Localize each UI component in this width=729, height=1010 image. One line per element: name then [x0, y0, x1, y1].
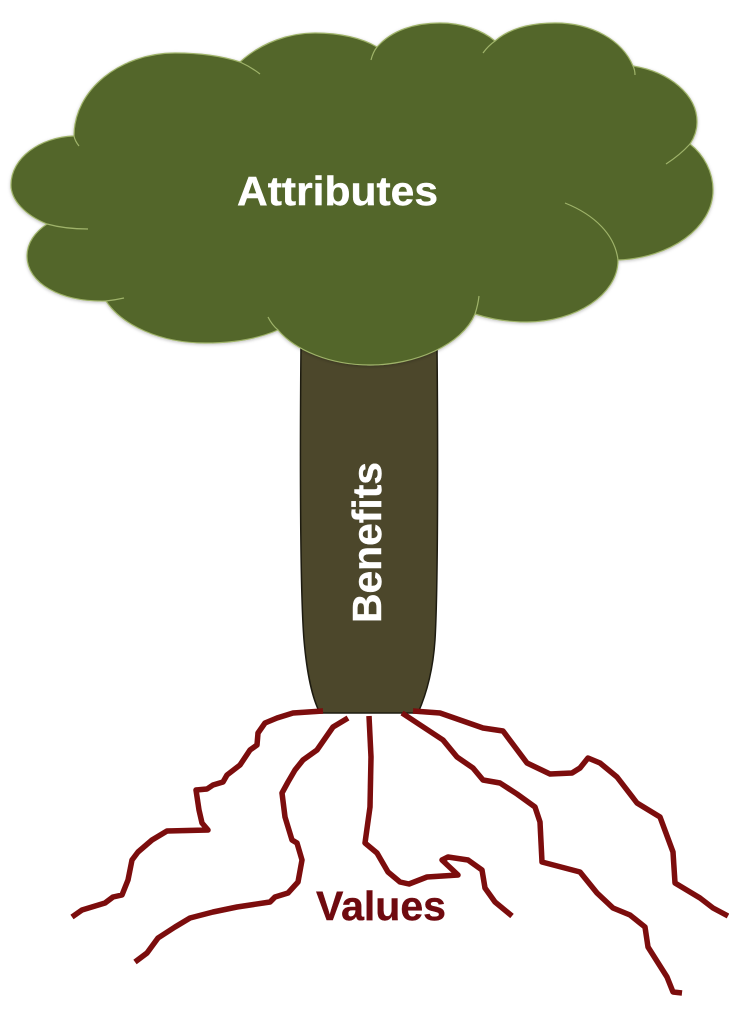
- label: Values: Values: [316, 883, 446, 929]
- root 2: [135, 718, 348, 962]
- tree canopy cloud: [11, 23, 713, 365]
- label: Benefits: Benefits: [344, 462, 390, 623]
- root 5: [413, 711, 728, 916]
- root 4: [402, 713, 682, 993]
- root 1: [72, 711, 323, 917]
- roots: [72, 711, 728, 993]
- trunk: [300, 345, 438, 713]
- label: Attributes: Attributes: [237, 168, 438, 214]
- root 3: [365, 716, 512, 916]
